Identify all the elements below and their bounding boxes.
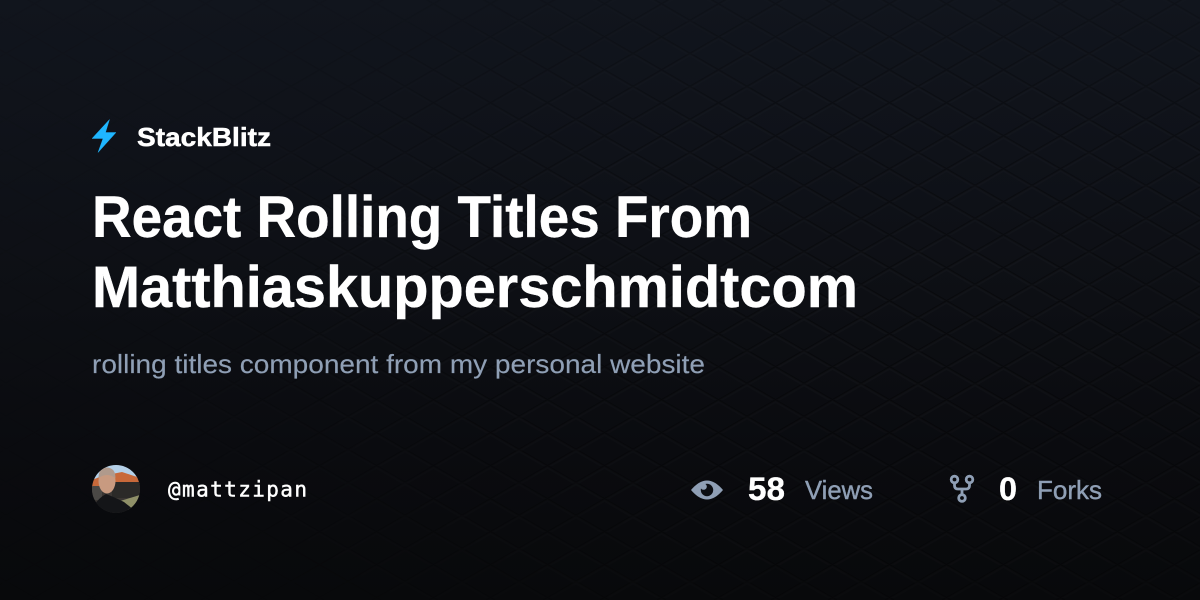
- title: React Rolling Titles From: [92, 185, 752, 250]
- avatar: [92, 465, 140, 516]
- stat: views label: Views: [805, 475, 873, 505]
- stat: forks count: 0: [999, 471, 1017, 507]
- icon: fork: [951, 476, 973, 501]
- icon: eye: [691, 480, 723, 500]
- stat: views count: 58: [748, 471, 785, 507]
- logo wordmark: StackBlitz: StackBlitz: [137, 122, 271, 152]
- stat: forks label: Forks: [1037, 475, 1102, 505]
- icon: StackBlitz lightning bolt: [92, 120, 116, 152]
- username: @mattzipan: [168, 478, 307, 502]
- title: Matthiaskupperschmidtcom: [92, 255, 858, 320]
- subtitle: rolling titles component from my personal website: [92, 349, 705, 379]
- title: [92, 185, 858, 320]
